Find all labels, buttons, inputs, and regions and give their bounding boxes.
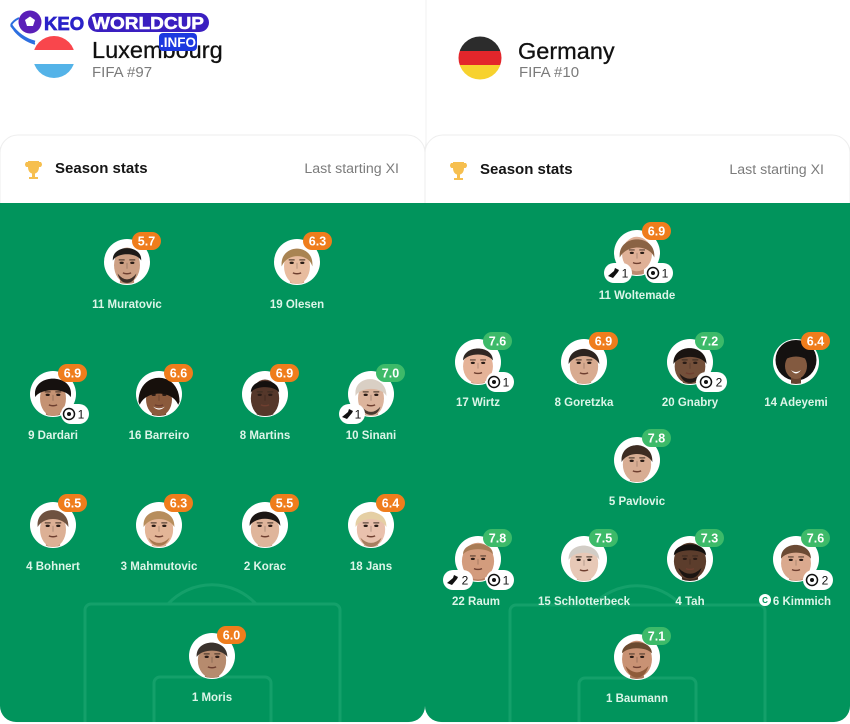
player: 1 Moris <box>189 626 246 704</box>
panel: Germany pitch <box>425 203 850 724</box>
player: 6 Kimmich <box>759 529 833 608</box>
player: 11 Muratovic <box>92 232 162 311</box>
player: 22 Raum: 1 <box>503 574 510 588</box>
player: 14 Adeyemi: 6.4 <box>807 334 824 348</box>
heading: Germany: Germany <box>518 38 615 64</box>
player: 4 Bohnert: 6.5 <box>64 496 81 510</box>
player: 20 Gnabry: 20 Gnabry <box>662 397 719 409</box>
player: 11 Muratovic: 5.7 <box>138 234 155 248</box>
player: 2 Korac: 5.5 <box>276 496 293 510</box>
player: 22 Raum: 7.8 <box>489 532 506 546</box>
heading: Season stats right: Season stats <box>480 161 573 178</box>
player: 15 Schlotterbeck: 15 Schlotterbeck <box>538 596 631 608</box>
player: 5 Pavlovic <box>609 429 671 508</box>
player: 8 Goretzka <box>555 332 618 409</box>
player: 4 Tah: 7.3 <box>701 532 718 546</box>
player: 9 Dardari: 9 Dardari <box>28 430 78 442</box>
icon: Germany flag <box>458 36 502 80</box>
player: 4 Tah <box>667 529 724 608</box>
icon: trophy left <box>25 161 42 179</box>
player: 8 Martins: 8 Martins <box>240 430 290 442</box>
player: 20 Gnabry: 2 <box>716 376 723 390</box>
heading: Luxembourg: Luxembourg <box>92 37 223 63</box>
logo: Keo Worldcup watermark <box>11 10 209 51</box>
player: 17 Wirtz: 1 <box>503 376 510 390</box>
panel: Luxembourg header <box>34 36 426 148</box>
panel: Germany header <box>458 36 615 80</box>
icon: Luxembourg flag <box>33 36 75 79</box>
player: 11 Woltemade: 11 Woltemade <box>599 290 675 302</box>
text: Last starting XI right: Last starting XI <box>729 162 824 178</box>
player: 6 Kimmich: 2 <box>822 574 829 588</box>
player: 18 Jans <box>348 494 405 573</box>
player: 3 Mahmutovic: 3 Mahmutovic <box>121 561 198 573</box>
player: 17 Wirtz <box>455 332 514 409</box>
text: Last starting XI left: Last starting XI <box>304 161 399 177</box>
player: 6 Kimmich: C <box>762 596 768 605</box>
player: 15 Schlotterbeck <box>538 529 631 608</box>
icon: trophy right <box>450 162 467 180</box>
logo: Keo Worldcup watermark: KEO <box>44 13 84 34</box>
text: Luxembourg FIFA rank: FIFA #97 <box>92 64 152 81</box>
player: 17 Wirtz: 17 Wirtz <box>456 397 500 409</box>
player: 22 Raum: 2 <box>462 574 469 588</box>
player: 10 Sinani <box>339 364 405 442</box>
player: 16 Barreiro: 16 Barreiro <box>129 430 189 442</box>
player: 10 Sinani: 7.0 <box>382 366 399 380</box>
player: 8 Goretzka: 6.9 <box>595 334 612 348</box>
player: 3 Mahmutovic <box>121 494 198 573</box>
panel: Germany season stats <box>425 135 850 722</box>
heading: Season stats left: Season stats <box>55 160 148 177</box>
player: 6 Kimmich: 6 Kimmich <box>773 596 831 608</box>
panel: Luxembourg season stats <box>0 135 425 722</box>
player: 16 Barreiro: 6.6 <box>170 366 187 380</box>
player: 14 Adeyemi <box>764 332 830 409</box>
player: 8 Goretzka: 8 Goretzka <box>555 397 614 409</box>
player: 11 Woltemade: 6.9 <box>648 224 665 238</box>
player: 19 Olesen: 6.3 <box>309 234 326 248</box>
player: 4 Bohnert <box>26 494 87 573</box>
logo: Keo Worldcup watermark: .INFO <box>160 35 196 50</box>
player: 17 Wirtz: 7.6 <box>489 334 506 348</box>
player: 1 Baumann: 1 Baumann <box>606 693 668 705</box>
player: 20 Gnabry: 7.2 <box>701 334 718 348</box>
player: 5 Pavlovic: 5 Pavlovic <box>609 496 666 508</box>
player: 19 Olesen <box>270 232 332 311</box>
player: 11 Woltemade: 1 <box>622 266 629 280</box>
text: Germany FIFA rank: FIFA #10 <box>519 64 579 81</box>
player: 8 Martins: 6.9 <box>276 366 293 380</box>
player: 2 Korac <box>242 494 299 573</box>
player: 16 Barreiro <box>129 364 193 442</box>
player: 19 Olesen: 19 Olesen <box>270 299 324 311</box>
player: 8 Martins <box>240 364 299 442</box>
player: 22 Raum: 22 Raum <box>452 596 500 608</box>
player: 18 Jans: 18 Jans <box>350 561 392 573</box>
player: 6 Kimmich: 7.6 <box>807 532 824 546</box>
player: 9 Dardari: 1 <box>78 408 85 422</box>
player: 4 Bohnert: 4 Bohnert <box>26 561 80 573</box>
player: 1 Moris: 6.0 <box>223 628 240 642</box>
player: 5 Pavlovic: 7.8 <box>648 432 665 446</box>
player: 20 Gnabry <box>662 332 727 409</box>
panel: Luxembourg pitch <box>0 203 425 724</box>
player: 1 Baumann: 7.1 <box>648 630 665 644</box>
player: 15 Schlotterbeck: 7.5 <box>595 532 612 546</box>
player: 9 Dardari: 6.9 <box>64 366 81 380</box>
player: 14 Adeyemi: 14 Adeyemi <box>764 397 828 409</box>
player: 11 Woltemade: 1 <box>662 266 669 280</box>
logo: Keo Worldcup watermark: WORLDCUP <box>92 13 204 33</box>
player: 9 Dardari <box>28 364 89 442</box>
player: 10 Sinani: 1 <box>355 408 362 422</box>
player: 3 Mahmutovic: 6.3 <box>170 496 187 510</box>
player: 18 Jans: 6.4 <box>382 496 399 510</box>
player: 11 Woltemade <box>599 222 675 302</box>
player: 1 Moris: 1 Moris <box>192 692 232 704</box>
player: 11 Muratovic: 11 Muratovic <box>92 299 162 311</box>
player: 1 Baumann <box>606 627 671 705</box>
player: 4 Tah: 4 Tah <box>675 596 705 608</box>
player: 10 Sinani: 10 Sinani <box>346 430 396 442</box>
player: 2 Korac: 2 Korac <box>244 561 287 573</box>
player: 22 Raum <box>443 529 514 608</box>
